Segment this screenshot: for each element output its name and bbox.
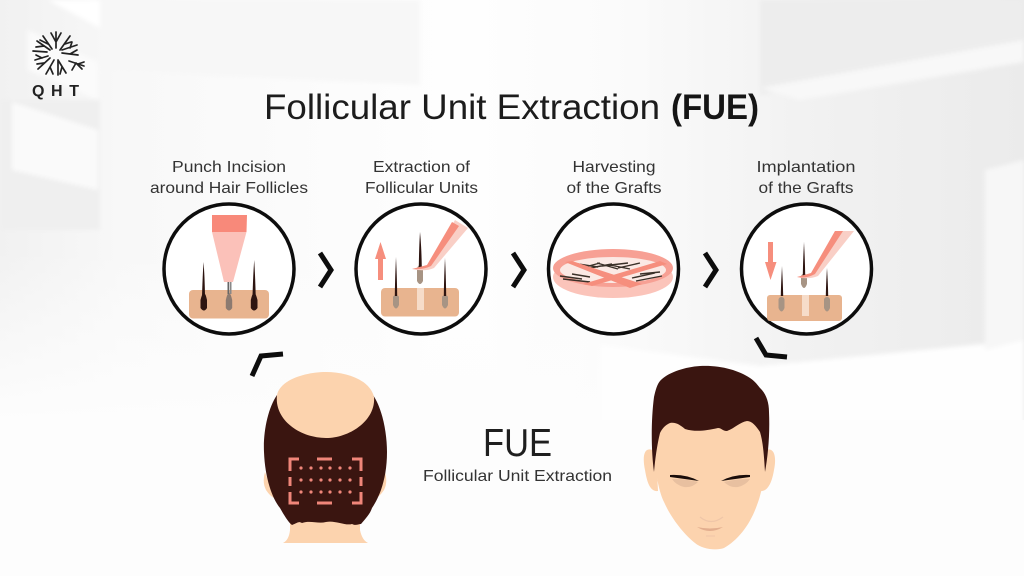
up arrow: [375, 242, 386, 280]
front face illustration: [644, 366, 775, 549]
step labels: [150, 159, 856, 197]
eyebrows: [670, 475, 750, 481]
skin block: [767, 295, 842, 321]
FUE label: [423, 422, 612, 485]
extracted follicle: [417, 265, 423, 284]
FUE label: Follicular Unit Extraction: [423, 468, 612, 485]
step labels: around Hair Follicles: [150, 180, 308, 197]
down arrow: [765, 242, 776, 280]
arrow: [320, 253, 331, 287]
eyelids: [672, 479, 750, 487]
icon: tree roots emblem: [33, 32, 84, 75]
title: (FUE): [671, 88, 759, 127]
nose: [700, 517, 723, 522]
arrow: [705, 253, 716, 287]
skin block: [189, 290, 269, 318]
tweezers: [412, 220, 468, 270]
petri dish: [553, 256, 673, 298]
step labels: Harvesting: [572, 159, 656, 176]
neck: [283, 515, 368, 543]
implanted follicle: [801, 274, 807, 288]
step labels: Implantation: [756, 159, 856, 176]
hair: [652, 366, 769, 472]
donor area marks: [290, 459, 361, 503]
hair: [264, 395, 387, 525]
grafts: [560, 263, 662, 282]
panel: extraction: [356, 204, 486, 334]
bald crown: [277, 372, 374, 438]
logo wordmark: QHT: [32, 83, 79, 100]
step labels: Extraction of: [373, 159, 471, 176]
title: Follicular Unit Extraction: [264, 88, 660, 127]
ears: [264, 472, 386, 498]
step labels: of the Grafts: [758, 180, 854, 197]
logo: QHT: [32, 32, 84, 100]
arrow: top-left chevron: [252, 354, 283, 376]
FUE label: FUE: [483, 422, 552, 465]
arrow: [513, 253, 524, 287]
panel: harvesting: [548, 204, 678, 334]
arrow: bottom-right chevron: [756, 338, 787, 357]
step labels: Follicular Units: [365, 180, 478, 197]
mouth: [697, 527, 723, 531]
step labels: of the Grafts: [566, 180, 662, 197]
tweezers: [797, 231, 854, 278]
panel: punch incision: [164, 204, 294, 334]
back of head illustration: [264, 372, 387, 543]
panel: implantation: [742, 204, 872, 334]
ears: [644, 449, 775, 491]
step labels: Punch Incision: [172, 159, 286, 176]
face: [654, 420, 766, 549]
cross bands: [565, 261, 667, 288]
punch tool: [212, 232, 246, 282]
skin block: [381, 288, 459, 316]
hair follicles: [202, 262, 205, 296]
